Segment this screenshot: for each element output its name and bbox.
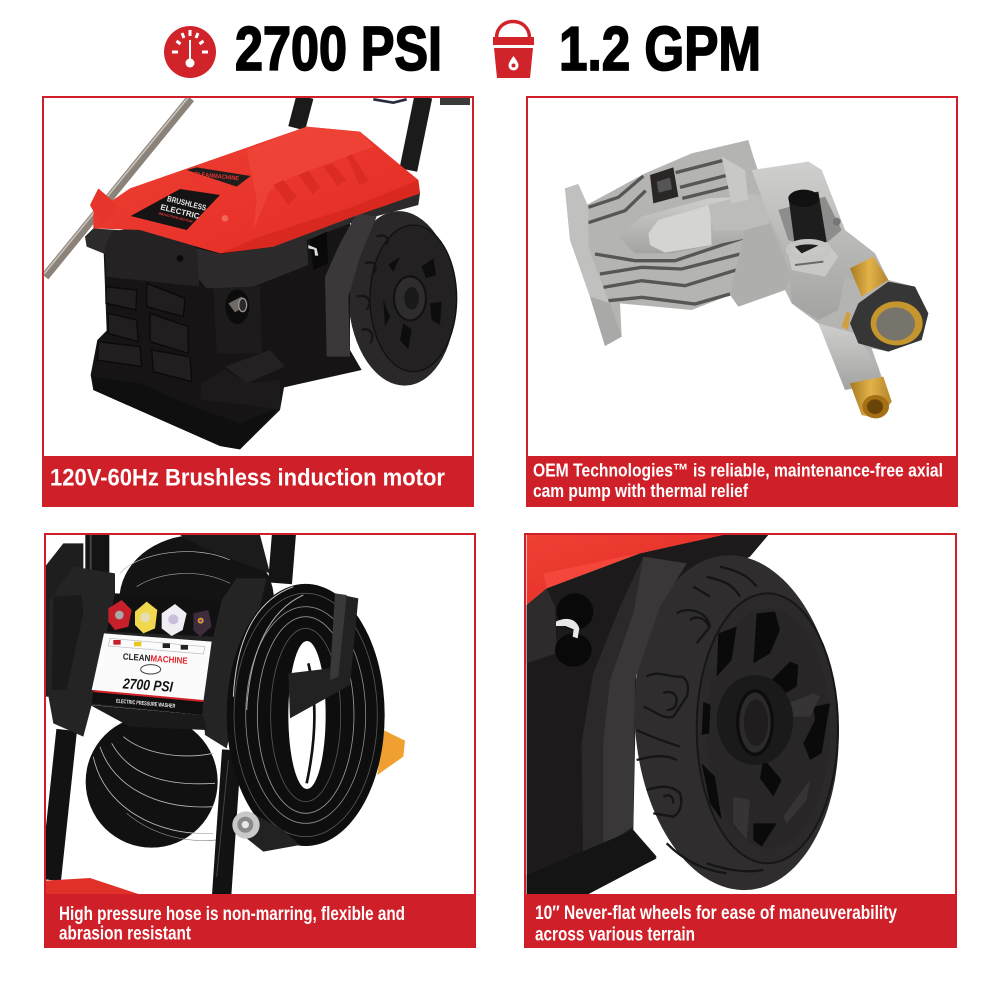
caption: wheels: 10″ Never-flat wheels for ease of maneuverability xyxy=(535,903,897,924)
icon: pressure gauge xyxy=(164,26,216,78)
photo: pressure washer motor housing: CLEANMACHINE xyxy=(194,172,239,182)
caption: pump xyxy=(526,456,958,507)
photo: pressure washer motor housing: INDUCTION MOTOR xyxy=(158,211,194,224)
photo: pump assembly xyxy=(565,140,928,418)
caption: hose: High pressure hose is non-marring, flexible and xyxy=(59,904,405,925)
panel: axial cam pump xyxy=(526,97,958,507)
icon: water bucket xyxy=(493,22,534,78)
caption: motor xyxy=(42,456,474,507)
caption: wheels xyxy=(524,894,957,948)
caption: pump: cam pump with thermal relief xyxy=(533,480,749,501)
caption: wheels: across various terrain xyxy=(535,924,695,946)
caption: hose: abrasion resistant xyxy=(59,924,192,944)
photo: pressure washer motor housing: ELECTRIC xyxy=(160,203,201,221)
photo: hose on frame xyxy=(45,533,405,896)
heading: 1.2 GPM: 1.2 GPM xyxy=(559,15,761,84)
panel: brushless motor xyxy=(42,97,474,507)
panel: high pressure hose xyxy=(44,533,476,948)
photo: hose on frame: ELECTRIC PRESSURE WASHER xyxy=(116,699,175,710)
header: pressure and flow specs xyxy=(164,15,761,84)
caption: hose xyxy=(44,894,476,948)
photo: pressure washer motor housing: BRUSHLESS xyxy=(166,194,208,213)
photo: hose on frame: CLEANMACHINE xyxy=(123,651,188,666)
panel: never-flat wheels xyxy=(524,534,957,948)
photo: pressure washer motor housing xyxy=(44,97,470,449)
caption: motor: 120V-60Hz Brushless induction motor xyxy=(50,464,445,492)
photo: hose on frame: 2700 PSI xyxy=(122,676,174,696)
heading: 2700 PSI: 2700 PSI xyxy=(235,15,442,84)
photo: wheel close-up xyxy=(527,535,850,897)
